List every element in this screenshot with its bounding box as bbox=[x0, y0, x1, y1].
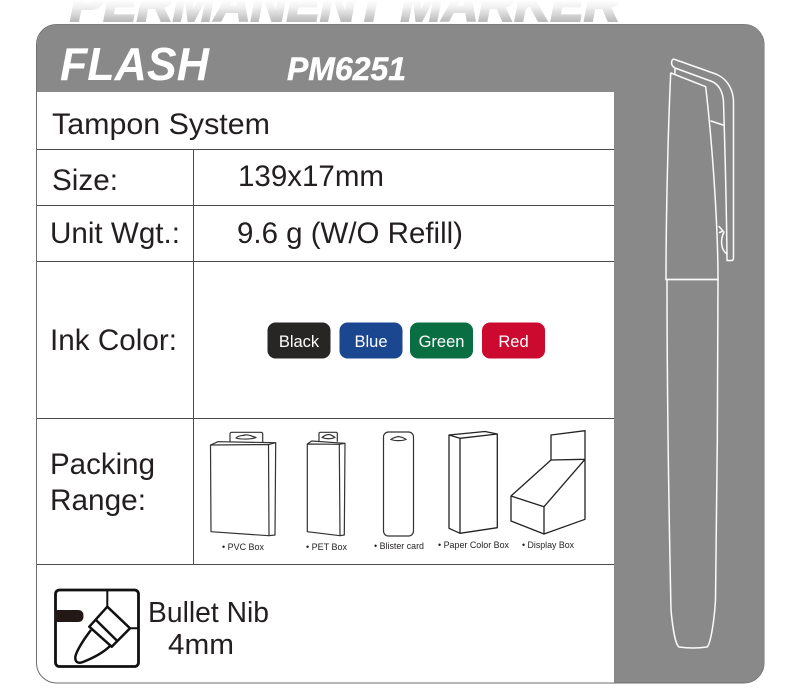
row: size: Size: bbox=[52, 164, 118, 197]
swatch: green bbox=[410, 322, 473, 358]
title: FLASH: FLASH bbox=[60, 38, 210, 90]
row: ink color: Ink Color: bbox=[50, 324, 177, 357]
row: size bbox=[52, 160, 384, 197]
icon: blister card bbox=[384, 432, 414, 536]
swatch: black bbox=[268, 322, 330, 358]
nib label: 4mm bbox=[168, 629, 234, 661]
icon: paper color box bbox=[449, 432, 497, 533]
label: paper color box: • Paper Color Box bbox=[438, 540, 509, 551]
row: tampon system: Tampon System bbox=[52, 108, 270, 141]
swatch: red: Red bbox=[498, 333, 529, 351]
row: unit weight: 9.6 g (W/O Refill) bbox=[237, 217, 463, 250]
swatch: blue: Blue bbox=[354, 333, 388, 351]
label: PVC box: • PVC Box bbox=[222, 542, 264, 553]
label: display box: • Display Box bbox=[522, 540, 574, 551]
nib label: Bullet Nib bbox=[148, 597, 269, 629]
pen outline bbox=[666, 59, 734, 648]
label: blister card: • Blister card bbox=[374, 541, 424, 552]
row: unit weight bbox=[50, 217, 463, 250]
row: packing range heading bbox=[50, 448, 155, 517]
table rules bbox=[37, 149, 614, 564]
row: size: 139x17mm bbox=[238, 160, 384, 193]
swatch: black: Black bbox=[279, 333, 320, 351]
pen barrel bbox=[667, 280, 718, 648]
swatch: green: Green bbox=[419, 333, 464, 351]
icon: PET box bbox=[307, 432, 345, 536]
row: ink color bbox=[50, 322, 545, 358]
pen clip bbox=[672, 59, 734, 260]
swatch: red bbox=[482, 322, 545, 358]
row: packing range heading: Range: bbox=[50, 484, 146, 517]
row: packing range heading: Packing bbox=[50, 448, 155, 481]
pen panel background bbox=[614, 92, 764, 682]
icon: PVC box bbox=[210, 432, 276, 536]
label: PET box: • PET Box bbox=[306, 542, 347, 553]
nib label bbox=[148, 597, 269, 661]
swatch: blue bbox=[340, 322, 402, 358]
icon: display box bbox=[511, 431, 585, 534]
pen cap bbox=[666, 73, 718, 280]
model number: PM6251 bbox=[287, 51, 406, 87]
header band bbox=[37, 24, 614, 92]
row: unit weight: Unit Wgt.: bbox=[50, 217, 180, 250]
icon: bullet nib bbox=[55, 590, 138, 666]
